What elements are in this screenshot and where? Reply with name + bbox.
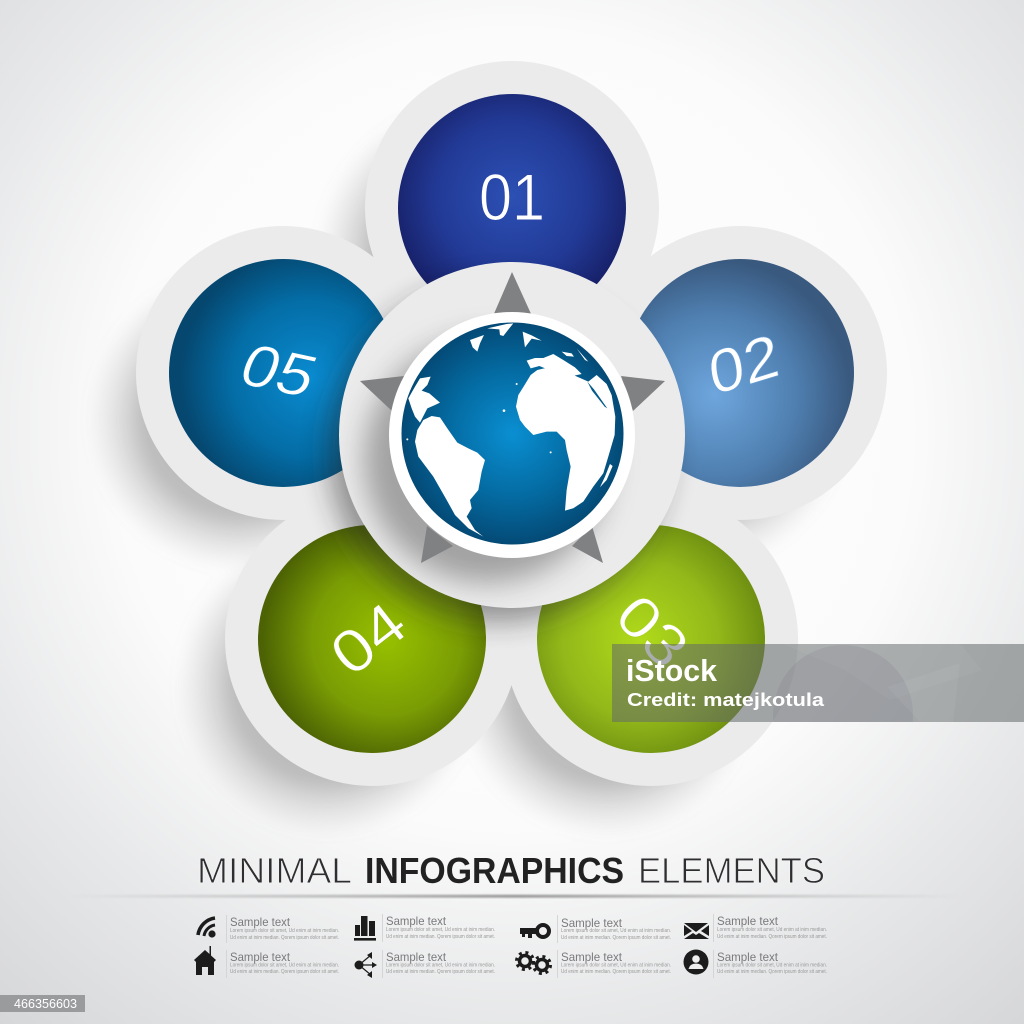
icon: key: [520, 925, 549, 938]
petal: 03: 03: [603, 582, 701, 681]
icon: envelope: [684, 923, 709, 939]
red sea: [587, 382, 607, 408]
legend item: key: [520, 915, 671, 943]
legend item: house: Lorem ipsum dolor sit amet, Ud enim at inim median.: [230, 962, 339, 968]
legend item: bar chart: Ud enim at inim median. Qorem ipsum dolor sit amet.: [386, 934, 495, 940]
icon: bars: [354, 916, 376, 941]
legend item: share: Lorem ipsum dolor sit amet, Ud enim at inim median.: [386, 962, 495, 968]
legend item: user: Ud enim at inim median. Qorem ipsum dolor sit amet.: [717, 969, 827, 975]
legend item: envelope: [684, 914, 827, 942]
star arms: [360, 272, 665, 563]
petal: 02: 02: [704, 320, 783, 408]
legend item: gears: [516, 950, 671, 978]
title: [197, 850, 825, 891]
legend item: user: Sample text: [717, 950, 779, 964]
legend item: user: Lorem ipsum dolor sit amet, Ud enim at inim median.: [717, 962, 827, 968]
image id tag: [0, 995, 85, 1012]
petal: 05: 05: [231, 331, 327, 410]
legend item: envelope: Sample text: [717, 914, 779, 928]
legend item: wifi: Ud enim at inim median. Qorem ipsum dolor sit amet.: [230, 935, 339, 941]
legend item: house: [194, 946, 339, 978]
legend item: wifi: Lorem ipsum dolor sit amet, Ud enim at inim median.: [230, 928, 339, 934]
legend item: key: Sample text: [561, 916, 623, 930]
legend item: user: [684, 950, 827, 978]
legend item: wifi: Sample text: [230, 915, 291, 929]
legend item: house: Sample text: [230, 950, 291, 964]
white disc shadow: [364, 337, 610, 583]
continents: [406, 323, 615, 537]
petal: 05: [136, 226, 430, 520]
petal: 03: [504, 492, 798, 786]
petal: 02: [593, 226, 887, 520]
legend item: bar chart: [354, 914, 495, 942]
center disc: [339, 262, 685, 608]
legend item: share: Sample text: [386, 950, 447, 964]
legend item: share: Ud enim at inim median. Qorem ipsum dolor sit amet.: [386, 969, 495, 975]
legend item: envelope: Lorem ipsum dolor sit amet, Ud enim at inim median.: [717, 927, 827, 933]
title: MINIMAL: [197, 850, 352, 891]
petal: 04: [225, 492, 519, 786]
divider: [70, 895, 960, 897]
image id tag: 466356603: [14, 997, 77, 1011]
petal: 04: 04: [318, 589, 419, 689]
title: INFOGRAPHICS: [365, 850, 624, 891]
legend item: house: Ud enim at inim median. Qorem ipsum dolor sit amet.: [230, 969, 339, 975]
legend item: gears: Lorem ipsum dolor sit amet, Ud enim at inim median.: [561, 962, 671, 968]
legend item: gears: Ud enim at inim median. Qorem ipsum dolor sit amet.: [561, 969, 671, 975]
globe: [389, 312, 635, 558]
watermark logo: iStock: [626, 653, 718, 688]
icon: gears: [516, 952, 550, 974]
watermark: [612, 644, 1024, 722]
watermark credit: Credit: matejkotula: [627, 690, 825, 710]
petal shadows: [87, 102, 848, 837]
icon: wifi: [198, 918, 216, 938]
legend item: bar chart: Sample text: [386, 914, 447, 928]
legend item: bar chart: Lorem ipsum dolor sit amet, Ud enim at inim median.: [386, 927, 495, 933]
icon: house: [194, 946, 216, 975]
legend item: wifi: [198, 915, 339, 943]
petal: 01: 01: [479, 160, 545, 234]
center disc shadow: [328, 282, 668, 622]
icon: user: [684, 950, 708, 974]
legend item: key: Lorem ipsum dolor sit amet, Ud enim at inim median.: [561, 928, 671, 934]
legend item: share: [354, 950, 495, 978]
legend item: gears: Sample text: [561, 950, 623, 964]
legend item: key: Ud enim at inim median. Qorem ipsum dolor sit amet.: [561, 935, 671, 941]
title: ELEMENTS: [638, 850, 825, 891]
legend item: envelope: Ud enim at inim median. Qorem ipsum dolor sit amet.: [717, 934, 827, 940]
icon: share arrows: [354, 952, 377, 978]
petal: 01: [365, 61, 659, 355]
